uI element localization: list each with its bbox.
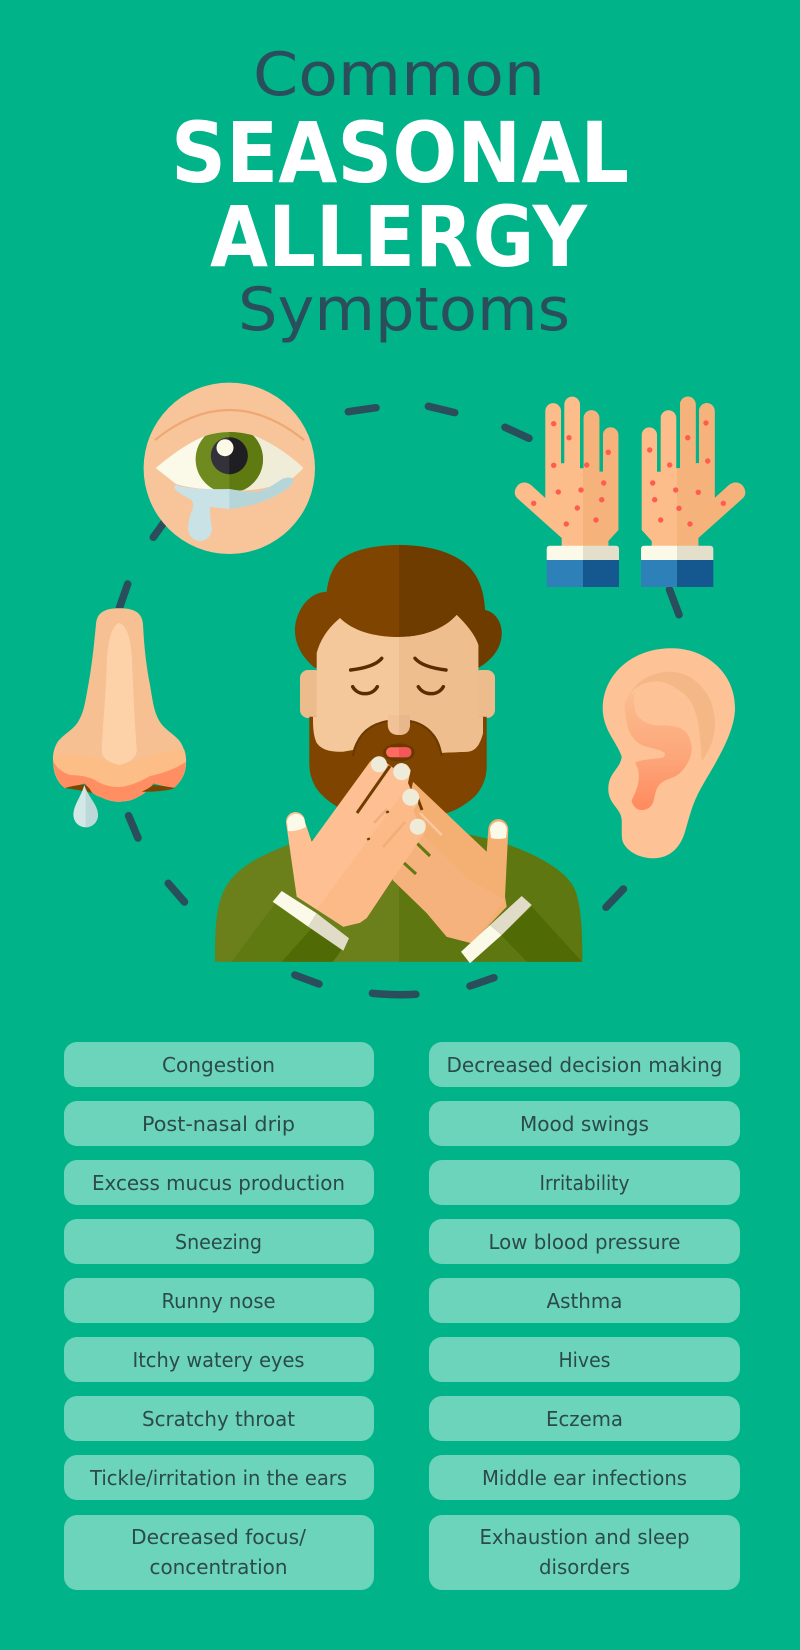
symptom: Exhaustion and sleep disorders: Exhaustion and sleep: [480, 1525, 690, 1549]
symptom: Decreased focus/concentration: Decreased focus/: [131, 1525, 306, 1549]
symptom: Runny nose: [64, 1278, 374, 1323]
symptom: Sneezing: Sneezing: [175, 1230, 262, 1254]
symptom: Itchy watery eyes: Itchy watery eyes: [132, 1348, 304, 1372]
right ear of man: [473, 670, 495, 718]
symptom: Asthma: [429, 1278, 740, 1323]
icon: ear: [603, 648, 735, 858]
symptom: Low blood pressure: Low blood pressure: [488, 1230, 680, 1254]
symptom: Decreased decision making: Decreased decision making: [446, 1053, 722, 1077]
symptoms list: right column: [429, 1042, 740, 1590]
fingernails: [287, 756, 507, 839]
symptom: Runny nose: Runny nose: [162, 1289, 276, 1313]
left hand (front): [286, 757, 426, 927]
symptom: Hives: Hives: [558, 1348, 610, 1372]
symptom: Post-nasal drip: [64, 1101, 374, 1146]
symptom: Tickle/irritation in the ears: Tickle/irritation in the ears: [89, 1466, 347, 1490]
symptom: Scratchy throat: Scratchy throat: [142, 1407, 295, 1431]
icon: nose with drip: [53, 608, 186, 827]
symptom: Exhaustion and sleep disorders: [429, 1515, 740, 1590]
symptom: Decreased focus/concentration: [64, 1515, 374, 1590]
symptom: Irritability: Irritability: [540, 1171, 630, 1195]
symptom: Excess mucus production: [64, 1160, 374, 1205]
symptom: Decreased decision making: [429, 1042, 740, 1087]
symptom: Mood swings: Mood swings: [520, 1112, 649, 1136]
symptom: Eczema: [429, 1396, 740, 1441]
left hand: [515, 397, 619, 587]
symptom: Hives: [429, 1337, 740, 1382]
nose: [388, 715, 410, 735]
left cuff: [273, 891, 349, 951]
shirt: [215, 820, 582, 962]
symptom: Tickle/irritation in the ears: [64, 1455, 374, 1500]
symptom: Decreased focus/concentration: concentration: [150, 1555, 288, 1579]
hair: [295, 545, 502, 668]
mouth: [383, 744, 415, 762]
dashed ring around the man: [118, 406, 679, 995]
symptom: Scratchy throat: [64, 1396, 374, 1441]
right hand (behind): [393, 782, 508, 943]
right hand: [641, 397, 745, 587]
title: Common: [253, 40, 545, 110]
symptom: Post-nasal drip: Post-nasal drip: [142, 1112, 295, 1136]
face: [313, 615, 483, 756]
ears: [300, 670, 322, 718]
symptom: Mood swings: [429, 1101, 740, 1146]
rash spots: [531, 420, 726, 527]
title: [171, 40, 629, 345]
icon: watery eye: [144, 383, 315, 554]
symptom: Exhaustion and sleep disorders: disorders: [539, 1555, 630, 1579]
symptom: Congestion: [64, 1042, 374, 1087]
beard: [309, 717, 487, 823]
icon: hands with rash: [515, 397, 745, 587]
symptom: Asthma: Asthma: [546, 1289, 622, 1313]
symptom: Congestion: Congestion: [162, 1053, 275, 1077]
symptom: Itchy watery eyes: [64, 1337, 374, 1382]
symptom: Middle ear infections: Middle ear infections: [482, 1466, 687, 1490]
title: ALLERGY: [210, 188, 588, 286]
symptom: Eczema: Eczema: [546, 1407, 623, 1431]
right cuff: [461, 896, 532, 963]
symptom: Irritability: [429, 1160, 740, 1205]
symptom: Low blood pressure: [429, 1219, 740, 1264]
symptom: Sneezing: [64, 1219, 374, 1264]
eyebrows and closed eyes: [351, 658, 446, 694]
symptoms list: left column: [64, 1042, 374, 1590]
title: SEASONAL: [171, 104, 629, 202]
illustration: man covering his mouth: [215, 545, 582, 963]
title: Symptoms: [238, 275, 570, 345]
symptom: Excess mucus production: Excess mucus production: [92, 1171, 345, 1195]
symptom: Middle ear infections: [429, 1455, 740, 1500]
